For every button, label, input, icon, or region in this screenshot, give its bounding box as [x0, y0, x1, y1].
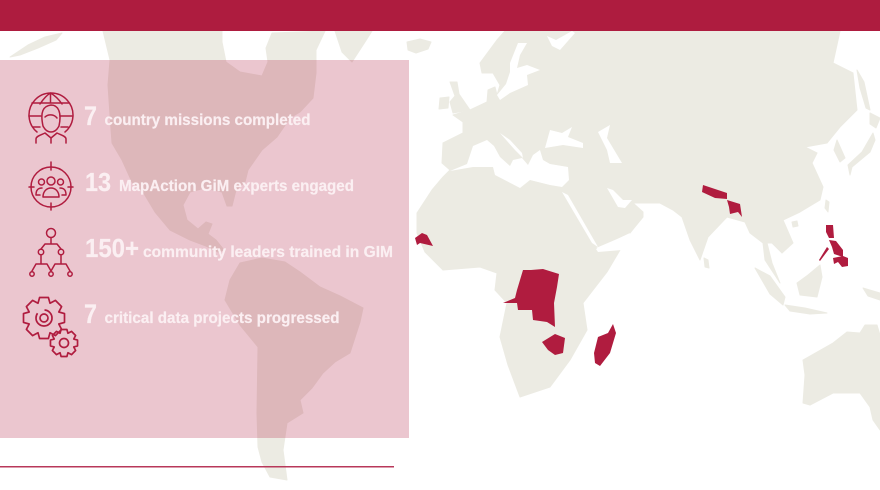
stat: data projects: critical data projects progressed — [104, 310, 340, 327]
country: Bangladesh — [727, 200, 742, 217]
stat: data projects: 7 — [84, 299, 97, 329]
highlighted countries — [415, 185, 848, 366]
stat: data projects — [84, 299, 340, 329]
country: DR Congo — [503, 269, 559, 327]
country: Madagascar — [594, 324, 616, 366]
stat: experts engaged: 13 — [85, 167, 111, 197]
stat: community leaders: 150+ — [85, 233, 139, 263]
country: Philippines — [819, 225, 848, 267]
inland seas — [450, 31, 632, 252]
stat: experts engaged — [85, 167, 354, 197]
stat: experts engaged: MapAction GiM experts engaged — [119, 178, 354, 195]
country: Nepal — [702, 185, 727, 199]
icon: organisation tree — [30, 228, 72, 276]
bottom rule — [0, 466, 394, 468]
stats panel — [0, 60, 409, 438]
stat: community leaders: community leaders trained in GIM — [143, 244, 393, 261]
stat: country missions: 7 — [84, 101, 97, 131]
icon: gears — [24, 298, 78, 357]
icon: globe with person — [29, 93, 73, 143]
top banner — [0, 0, 880, 31]
country: Zimbabwe — [542, 334, 565, 355]
country: Senegal — [415, 233, 433, 246]
stat: country missions: country missions completed — [104, 112, 310, 129]
stat: community leaders — [85, 233, 393, 263]
icon: target with people — [29, 162, 73, 210]
stat: country missions — [84, 101, 310, 131]
